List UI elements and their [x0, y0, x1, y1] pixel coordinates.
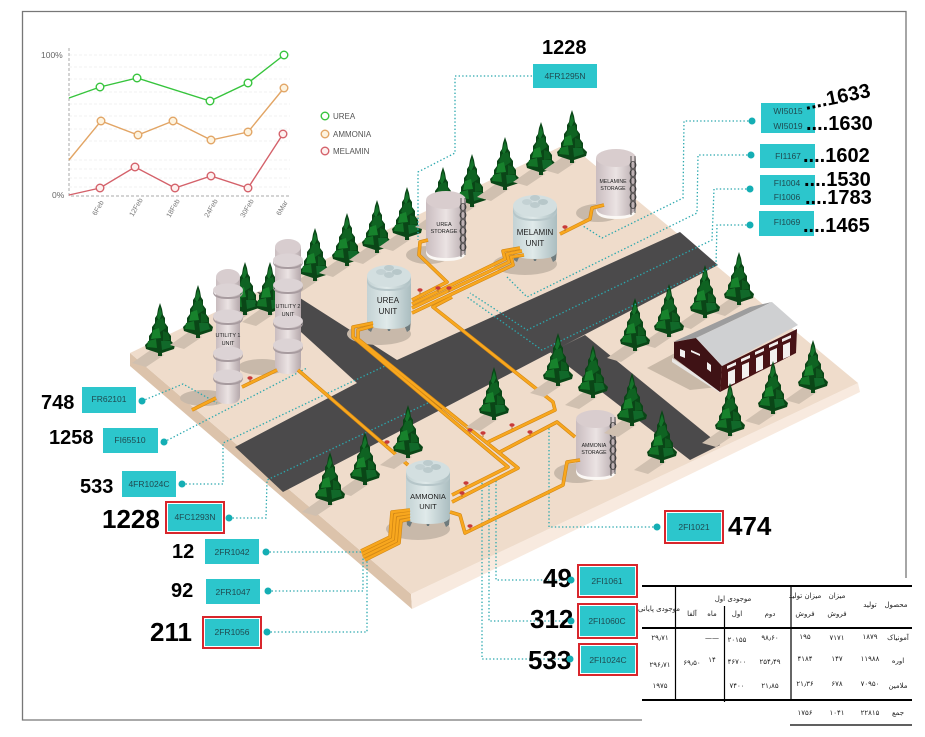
- utility 1 tower: UNIT: [222, 341, 235, 347]
- tag: 4FC1293N: [102, 502, 232, 534]
- tag: FI1069: ....1465: [803, 215, 870, 237]
- production table: ۲۵۴٫۴۹: [759, 658, 781, 666]
- tag: WI5015 and WI5019: WI5019: [773, 121, 803, 131]
- tag: 2FR1042: [172, 539, 270, 564]
- production table: ——: [705, 634, 719, 642]
- tag: WI5015 and WI5019: [748, 80, 873, 135]
- production table: دوم: [765, 610, 775, 618]
- utility 1 tower: [213, 269, 243, 404]
- tag: 2FI1060C: 2FI1060C: [588, 616, 626, 626]
- tag: FI1167: [748, 144, 870, 168]
- production table: [638, 585, 925, 737]
- urea storage: STORAGE: [431, 229, 458, 235]
- tag: WI5015 and WI5019: ....1633: [803, 80, 872, 115]
- tag: FI1004 and FI1006: FI1006: [774, 192, 801, 202]
- tank ground shadows: [180, 204, 620, 540]
- tag: 4FR1295N: 4FR1295N: [544, 71, 586, 81]
- production table: ۲۱٫۸۵: [761, 682, 779, 690]
- ammonia unit: [406, 460, 450, 527]
- ammonia storage: [576, 410, 616, 480]
- chart legend: [321, 112, 372, 156]
- tag: FI1167: ....1602: [803, 145, 870, 167]
- trees behind the plant: [132, 110, 754, 367]
- production table: میزان تولید: [789, 592, 822, 600]
- tag: 4FR1024C: [80, 471, 186, 498]
- production table: آلفا: [687, 609, 698, 618]
- production table: ۱۴۷: [831, 655, 843, 663]
- production table: جمع: [892, 709, 904, 717]
- urea series: [69, 51, 288, 105]
- tag: WI5015 and WI5019: ....1630: [806, 113, 873, 135]
- x axis labels: 24Feb: [204, 198, 220, 219]
- tag: WI5015 and WI5019: WI5015: [773, 106, 803, 116]
- urea storage: [426, 191, 466, 261]
- tag: FI1069: [746, 211, 870, 237]
- x axis labels: 30Feb: [240, 198, 256, 219]
- melamin unit: [513, 195, 557, 262]
- trees in front of the plant: [302, 333, 828, 516]
- tag: FI1004 and FI1006: ....1530: [804, 169, 871, 191]
- urea unit: [367, 265, 411, 332]
- production table: ۲۰۱۵۵: [728, 636, 747, 644]
- production table: موجودی اول: [715, 595, 752, 603]
- chart legend: AMMONIA: [333, 130, 372, 139]
- production table: ۴۱۸۴: [797, 655, 813, 663]
- tag: 2FR1056: 2FR1056: [215, 627, 250, 637]
- orange process pipes: [192, 205, 604, 560]
- production table: تولید: [863, 601, 877, 609]
- tag: 2FI1060C: [530, 604, 637, 638]
- tag: 2FI1061: [543, 563, 637, 597]
- tag: 2FI1021: [654, 511, 772, 543]
- production table: ۲۹۶٫۷۱: [649, 661, 671, 669]
- x axis labels: 12Feb: [129, 197, 145, 218]
- melamin unit: MELAMIN: [517, 228, 553, 237]
- production table: ۱۰۴۱: [829, 709, 845, 717]
- production table: ۱۸۷۹: [862, 633, 878, 641]
- production table: ۲۹٫۷۱: [651, 634, 669, 642]
- tag: 2FI1024C: [528, 644, 637, 675]
- production table: محصول: [884, 601, 908, 609]
- production table: ۱۱۹۸۸: [861, 655, 880, 663]
- melamine storage: MELAMINE: [599, 179, 627, 185]
- production table: فروش: [827, 610, 847, 618]
- utility 1 tower: UTILITY 1: [216, 333, 240, 339]
- tag: 4FC1293N: 1228: [102, 504, 160, 534]
- ammonia series: [69, 84, 288, 160]
- production table: ۱۹۷۵: [652, 682, 668, 690]
- production table: ۴۶۷۰۰: [728, 658, 746, 666]
- tag: FI65510: FI65510: [114, 435, 146, 445]
- tag: 2FR1056: [150, 617, 270, 648]
- tag: 2FR1056: 211: [150, 617, 192, 647]
- production table: ۶۷۸: [831, 680, 843, 688]
- utility 2 tower: UTILITY 2: [276, 304, 300, 310]
- tag: 2FR1047: 2FR1047: [216, 587, 251, 597]
- production table: آمونیاک: [887, 633, 910, 642]
- line chart: 0%: [52, 190, 65, 200]
- production table: ۲۲۸۱۵: [861, 709, 880, 717]
- tag: FI1069: FI1069: [774, 217, 801, 227]
- road network: [235, 232, 720, 492]
- melamin series: [69, 130, 287, 195]
- tag: FI1004 and FI1006: ....1783: [805, 187, 872, 209]
- ammonia storage: AMMONIA: [582, 443, 607, 449]
- valves: [247, 225, 568, 530]
- utility 2 tower: UNIT: [282, 312, 295, 318]
- production table: موجودی پایانی: [638, 605, 680, 613]
- tag: 2FR1042: 2FR1042: [215, 547, 250, 557]
- utility 2 tower: [273, 239, 303, 374]
- production table: ۷۱۷۱: [829, 634, 845, 642]
- ammonia storage: STORAGE: [581, 450, 607, 456]
- tag: FR62101: FR62101: [92, 394, 127, 404]
- production table: ۱۷۵۶: [797, 709, 813, 717]
- tag: 2FI1024C: 533: [528, 645, 571, 675]
- x axis labels: 18Feb: [166, 198, 182, 219]
- tag: FI1167: FI1167: [775, 151, 801, 161]
- production table: ۹۸٫۶۰: [761, 634, 779, 642]
- production table: میزان: [829, 592, 846, 600]
- production table: ۶۹٫۵۰: [683, 659, 701, 667]
- production table: اوره: [892, 657, 904, 665]
- tag: 2FR1047: 92: [171, 580, 193, 602]
- tag: 2FI1021: 2FI1021: [678, 522, 710, 532]
- tag: FI65510: [49, 427, 168, 453]
- tag: FI1004 and FI1006: [746, 169, 872, 209]
- x axis labels: 6Mar: [276, 199, 290, 217]
- production table: ۷۰۹۵۰: [861, 680, 879, 688]
- isometric platform: [130, 143, 860, 609]
- x axis labels: 6Feb: [92, 200, 106, 217]
- tag: FR62101: 748: [41, 392, 74, 414]
- tag: 2FI1021: 474: [728, 511, 772, 541]
- tag: 4FR1024C: 4FR1024C: [128, 479, 170, 489]
- urea storage: UREA: [436, 222, 452, 228]
- melamine storage: [596, 149, 636, 219]
- line chart: [41, 48, 291, 219]
- melamine storage: STORAGE: [600, 186, 626, 192]
- production table: ۱۹۵: [799, 633, 811, 641]
- chart legend: UREA: [333, 112, 356, 121]
- urea unit: UREA: [377, 296, 400, 305]
- tag: FR62101: [41, 387, 146, 414]
- warehouse building: [647, 302, 798, 393]
- tag: FI1004 and FI1006: FI1004: [774, 178, 801, 188]
- tag: 2FI1024C: 2FI1024C: [589, 655, 627, 665]
- tag: 2FI1061: 49: [543, 563, 572, 593]
- tag: 4FR1295N: 1228: [542, 37, 586, 59]
- urea unit: UNIT: [379, 307, 397, 316]
- tag: 2FR1047: [171, 579, 272, 604]
- tag: 4FC1293N: 4FC1293N: [174, 512, 216, 522]
- ammonia unit: AMMONIA: [410, 492, 446, 501]
- production table: ماه: [707, 610, 717, 618]
- tag: 2FR1042: 12: [172, 541, 194, 563]
- production table: ملامین: [888, 682, 908, 690]
- tag: 4FR1295N: [533, 37, 597, 88]
- production table: اول: [732, 610, 742, 618]
- production table: فروش: [795, 610, 815, 618]
- production table: ۲۱٫۳۶: [796, 680, 814, 688]
- line chart: 100%: [41, 50, 63, 60]
- dotted connector lines: [142, 76, 752, 659]
- tag: FI65510: 1258: [49, 427, 94, 449]
- x axis labels: [92, 197, 290, 219]
- melamin unit: UNIT: [526, 239, 544, 248]
- production table: ۱۴: [708, 656, 716, 664]
- production table: ۷۴۰۰: [729, 682, 745, 690]
- tag: 2FI1060C: 312: [530, 604, 573, 634]
- tag: 4FR1024C: 533: [80, 476, 113, 498]
- chart legend: MELAMIN: [333, 147, 370, 156]
- ammonia unit: UNIT: [419, 502, 437, 511]
- tag: 2FI1061: 2FI1061: [591, 576, 623, 586]
